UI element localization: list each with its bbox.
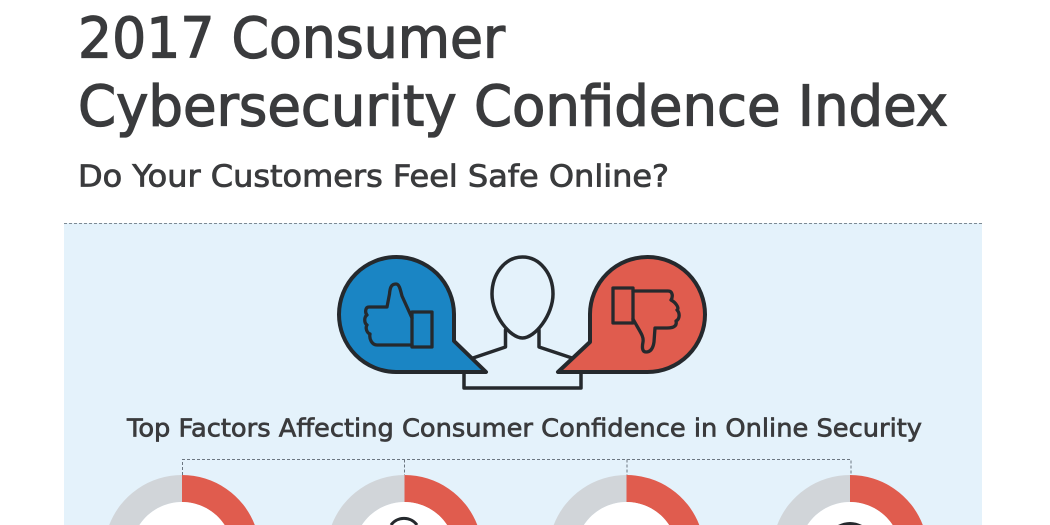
donut chart 1	[109, 475, 255, 525]
donut chart 3	[554, 475, 699, 525]
heading: Top Factors Affecting Consumer Confidence in Online Security	[126, 414, 922, 442]
donut chart 2	[332, 475, 477, 525]
title	[78, 6, 948, 140]
title: 2017 Consumer	[78, 6, 506, 72]
icon: thumbs down bubble	[558, 257, 705, 372]
connector lines	[182, 460, 851, 475]
icon: thumbs up bubble	[339, 257, 486, 372]
icon: circle outline	[391, 518, 417, 525]
panel: top factors	[64, 223, 982, 525]
title: Cybersecurity Confidence Index	[78, 74, 948, 140]
icon: person with thumbs up and thumbs down speech bubbles	[339, 257, 705, 388]
icon: person outline	[464, 257, 581, 388]
icon: arc outline	[838, 522, 862, 525]
subtitle: Do Your Customers Feel Safe Online?	[78, 160, 669, 194]
donut chart 4	[777, 475, 923, 525]
